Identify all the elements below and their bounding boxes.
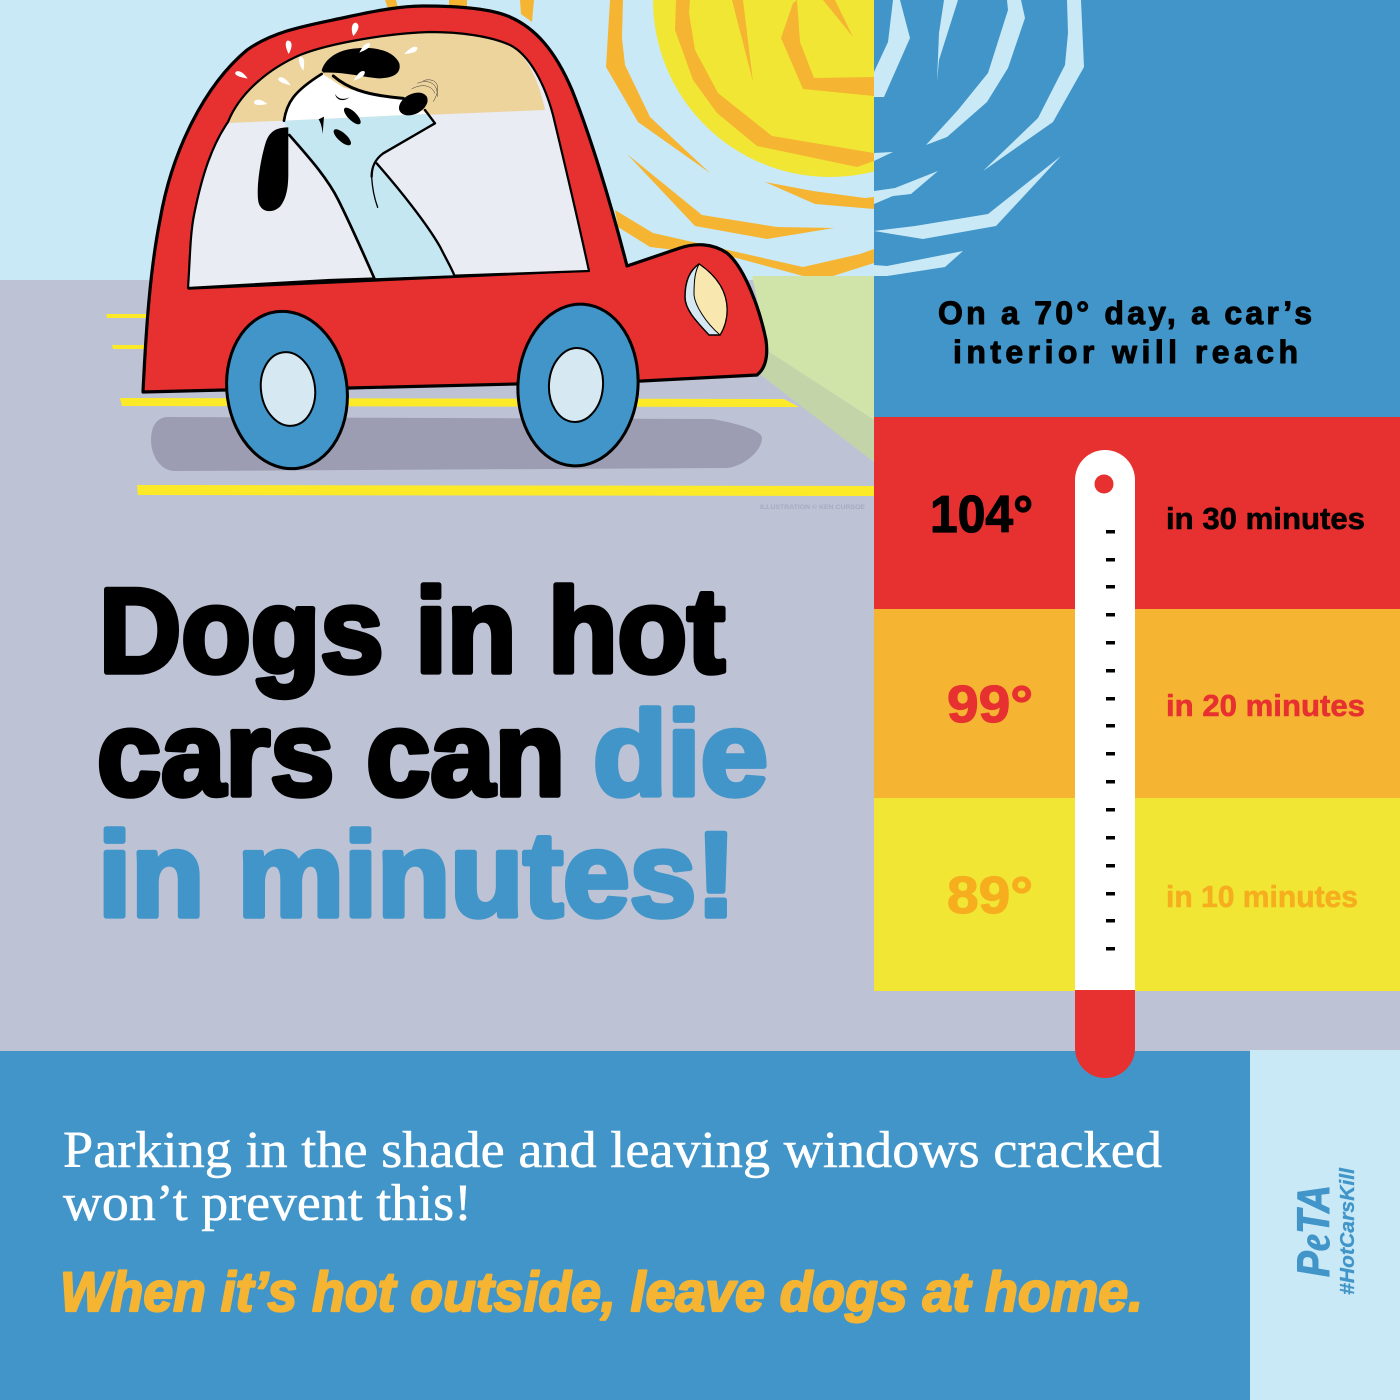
- dog side ear: [258, 127, 288, 211]
- blue panel: car interior intro: [874, 0, 1400, 417]
- main headline: [97, 564, 768, 942]
- PETA logo: PeTA: [1288, 1185, 1339, 1277]
- thermometer ticks: [1106, 530, 1115, 950]
- road lines: [106, 314, 874, 496]
- headlight: [685, 264, 727, 335]
- call to action: When it’s hot outside, leave dogs at home.: [60, 1260, 1143, 1323]
- sniff lines: [412, 80, 438, 102]
- illustration credit: ILLUSTRATION © KEN CURSOE: [760, 503, 866, 511]
- logo panel: [1250, 1050, 1400, 1400]
- warning text: won’t prevent this!: [63, 1175, 472, 1232]
- temperature band: 20 minutes: [874, 609, 1400, 798]
- dog neck: [284, 114, 454, 278]
- grass and curb: [752, 276, 874, 462]
- sweat drops: [235, 23, 417, 105]
- dog brow and mouth marks: [319, 94, 349, 134]
- temperature band: 30 minutes: [874, 417, 1400, 609]
- dog: [235, 23, 454, 278]
- rear wheel: [217, 303, 357, 477]
- car shadow: [151, 417, 762, 471]
- intro text: [938, 295, 1312, 370]
- warning text: [63, 1122, 1162, 1232]
- bottom blue panel: [0, 1051, 1250, 1400]
- temperature band: 10 minutes: [874, 798, 1400, 991]
- sun illustration: [385, 0, 874, 276]
- temperature band: 20 minutes: in 20 minutes: [1166, 688, 1365, 723]
- thermometer: [1075, 450, 1135, 1078]
- road background: [0, 280, 1400, 1051]
- main headline: Dogs in hot: [99, 564, 725, 698]
- dog head: [284, 73, 427, 121]
- intro text: interior will reach: [953, 334, 1298, 370]
- temperature band: 20 minutes: 99°: [947, 676, 1033, 734]
- window sill line: [188, 271, 589, 289]
- hashtag: #HotCarsKill: [1337, 1168, 1359, 1295]
- temperature band: 30 minutes: in 30 minutes: [1166, 501, 1365, 536]
- window outline: [188, 32, 589, 288]
- dog eyes: [341, 105, 363, 127]
- main headline: in minutes!: [98, 808, 736, 942]
- car: [143, 6, 767, 477]
- car body: [143, 6, 767, 392]
- main headline: die: [593, 687, 768, 821]
- temperature band: 10 minutes: in 10 minutes: [1166, 879, 1358, 914]
- tan upper window: [227, 32, 545, 123]
- intro text: On a 70° day, a car’s: [938, 295, 1312, 331]
- dog top ear: [322, 48, 400, 78]
- warning text: Parking in the shade and leaving windows cracked: [63, 1122, 1162, 1179]
- car window: [188, 32, 589, 288]
- sky background: [0, 0, 874, 280]
- main headline: cars can: [97, 687, 565, 821]
- temperature band: 30 minutes: 104°: [930, 486, 1033, 544]
- dog outlines: [284, 74, 454, 278]
- front wheel: [512, 300, 644, 470]
- dog nose: [395, 88, 432, 120]
- temperature band: 10 minutes: 89°: [947, 867, 1033, 925]
- sun rays on blue panel: [874, 0, 1084, 276]
